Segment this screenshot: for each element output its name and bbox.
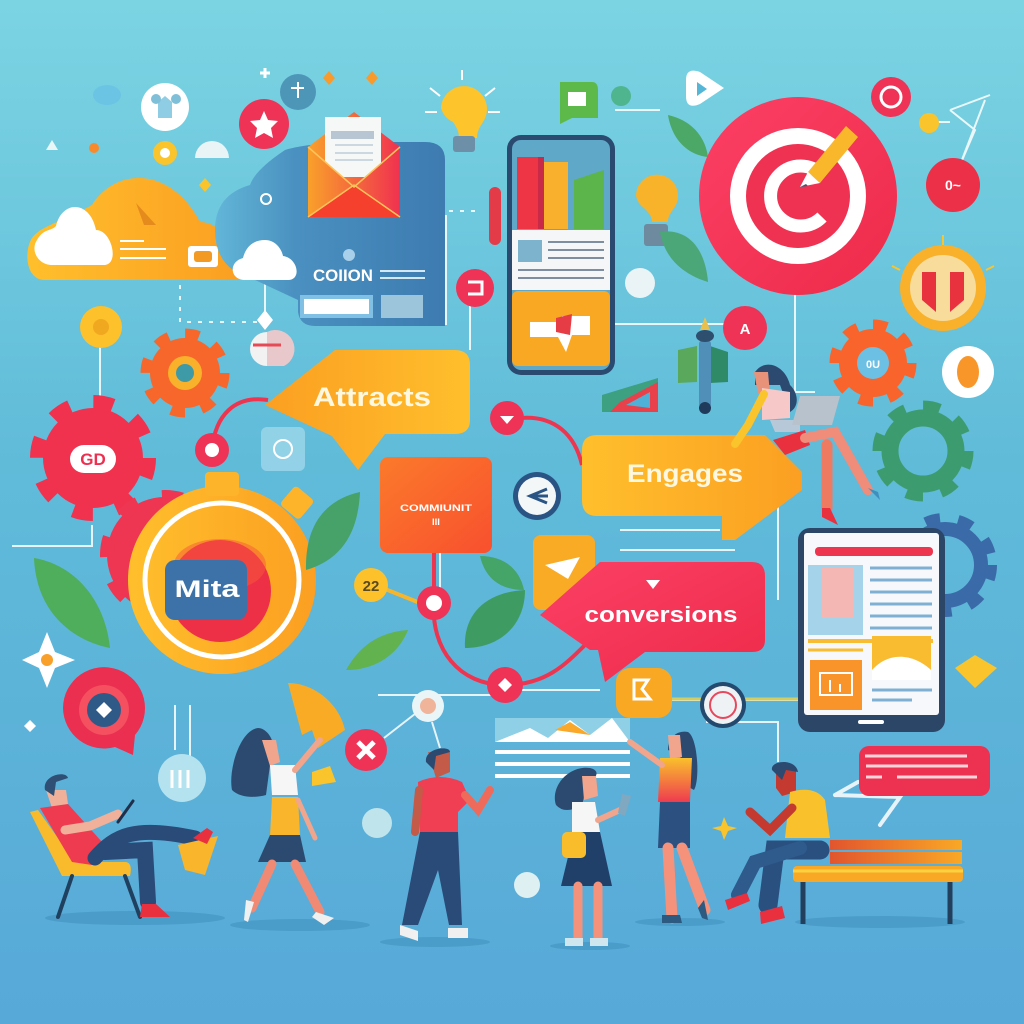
node: red connector top	[490, 401, 524, 435]
icon: orange gear left	[146, 334, 224, 412]
icon: green leaf top	[668, 115, 708, 157]
icon: number badge 22	[354, 568, 388, 602]
panel: orange content card: III	[432, 517, 440, 528]
panel: phone chart	[507, 135, 615, 375]
icon: number badge 22: 22	[363, 578, 379, 595]
icon: red pill	[489, 187, 501, 245]
node: red connector bottom	[487, 667, 523, 703]
icon: leaf center 2	[480, 556, 524, 590]
person: woman on engages	[735, 365, 880, 525]
icon: red dial	[63, 667, 145, 755]
person: woman with paper	[231, 728, 334, 925]
person: man on bench	[725, 762, 830, 924]
icon: orange tag	[616, 668, 672, 718]
panel: orange content card	[380, 457, 492, 553]
icon: pale circle	[362, 808, 392, 838]
coupon label: COIION	[313, 266, 373, 285]
icon: node circle	[412, 690, 444, 722]
icon: blue gear	[898, 518, 992, 612]
icon: map card	[602, 378, 658, 412]
node: red connector mid	[417, 586, 451, 620]
icon: red pin badge	[456, 269, 494, 307]
icon: green gear	[878, 406, 968, 496]
coupon fields	[300, 295, 423, 318]
icon: pencil	[800, 126, 858, 187]
icon: white circle badge	[141, 83, 189, 131]
icon: red star badge	[239, 99, 289, 149]
icon: red gear behind badge	[107, 497, 223, 613]
panel: tablet	[798, 528, 945, 732]
node: red connector	[195, 433, 229, 467]
icon: play button	[686, 71, 724, 106]
icon: orange gear right	[835, 325, 911, 401]
person: man in chair	[30, 774, 218, 917]
icon: medal	[892, 235, 994, 331]
bar chart	[517, 157, 604, 229]
icon: envelope	[308, 112, 400, 217]
Mita label	[165, 560, 247, 620]
ground shadows	[45, 911, 965, 950]
panel: email coupon	[215, 112, 445, 326]
yellow card	[512, 291, 610, 366]
callout: Engages: Engages	[627, 460, 743, 488]
icon: arrow circle	[513, 472, 561, 520]
callout: Attracts: Attracts	[313, 382, 431, 412]
icon: lightbulb top	[425, 70, 500, 152]
icon: bench back	[830, 840, 962, 864]
icon: star accent	[712, 817, 737, 840]
icon: small white dome	[195, 141, 229, 158]
icon: small yellow tag	[312, 766, 336, 786]
person: girl in navy skirt	[555, 768, 631, 946]
panel: red message bubble	[859, 746, 990, 796]
person: woman in yellow top	[630, 732, 708, 923]
panel: Mita badge	[128, 472, 316, 674]
icon: small white orb	[514, 872, 540, 898]
panel: orange content card: COMMIUNIT	[400, 503, 472, 514]
red path connectors	[212, 399, 585, 685]
callout: conversions: conversions	[584, 602, 738, 627]
icon: dark leaf	[660, 231, 708, 282]
callout: Attracts	[265, 350, 470, 470]
icon: leaf lower	[346, 630, 408, 670]
icon: green chat	[560, 82, 598, 124]
icon: white cloud	[233, 240, 297, 280]
icon: lightbulb orange	[636, 175, 678, 246]
Mita label: Mita	[174, 576, 240, 603]
icon: white dot	[625, 268, 655, 298]
small decorative marks	[24, 68, 378, 732]
icon: sparkle	[22, 632, 75, 688]
article card	[512, 230, 610, 290]
icon: red gear left	[37, 402, 149, 514]
icon: pin connector	[250, 310, 295, 366]
icon: bench	[793, 866, 963, 924]
callout: conversions	[540, 562, 765, 682]
icon: small red A badge	[723, 306, 767, 350]
icon: small teal badge	[280, 74, 316, 110]
icon: leaf center 1	[465, 590, 525, 648]
icon: leaf right of badge	[306, 492, 360, 570]
icon: red badge 0~	[926, 158, 980, 212]
person: man in red	[400, 748, 490, 941]
icon: white ring yellow	[942, 346, 994, 398]
icon: orange folded paper	[288, 683, 345, 748]
icon: red gear left: GD	[80, 450, 106, 469]
icon: white ring dial	[700, 682, 746, 728]
icon: target	[699, 97, 897, 295]
icon: yellow card behind callout	[533, 535, 595, 610]
icon: yellow dot	[919, 113, 939, 133]
icon: yellow pin	[80, 306, 122, 348]
icon: yellow chip	[955, 655, 997, 688]
icon: small green dot	[611, 86, 631, 106]
icon: glass card	[261, 427, 305, 471]
icon: red X badge	[345, 729, 387, 771]
icon: mountain chart	[495, 718, 630, 776]
icon: pen tool	[678, 317, 728, 414]
icon: small yellow badge	[153, 141, 177, 165]
icon: red badge 0~: 0~	[945, 177, 961, 193]
icon: glass orb	[158, 754, 206, 802]
icon: big leaf left	[34, 558, 110, 648]
icon: red small ring top right	[871, 77, 911, 117]
icon: orange gear right: 0U	[866, 359, 880, 371]
panel: yellow cloud	[27, 178, 240, 280]
icon: small red A badge: A	[740, 321, 751, 338]
callout: Engages	[582, 435, 802, 540]
connector lines	[12, 95, 990, 825]
